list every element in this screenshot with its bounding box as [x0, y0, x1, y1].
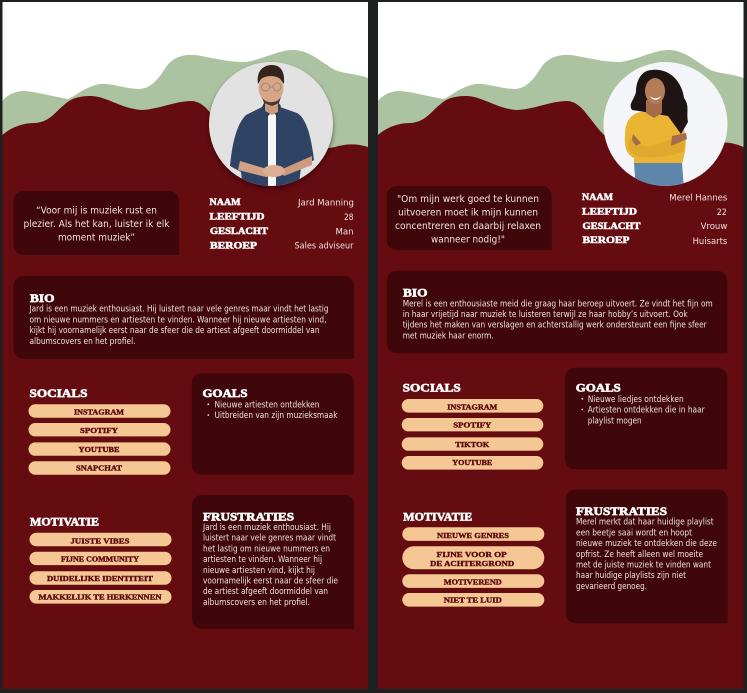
motivatie	[30, 517, 172, 604]
socials: SPOTIFY	[453, 420, 492, 430]
socials: INSTAGRAM	[447, 402, 497, 411]
frustraties: artiesten te vinden. Wanneer hij	[203, 555, 322, 565]
frustraties: FRUSTRATIES	[576, 506, 667, 518]
bio	[387, 271, 727, 353]
personal details: NAAM	[210, 198, 241, 208]
frustraties: haar huidige playlists zijn niet	[576, 571, 687, 581]
quote: wanneer nodig!"	[431, 234, 505, 246]
goals: Nieuwe artiesten ontdekken	[214, 400, 320, 410]
bio: tijdens het maken van verslagen en achterstallig werk ondersteunt een fijne sfeer	[403, 321, 707, 331]
motivatie: NIET TE LUID	[444, 596, 502, 604]
bio: BIO	[30, 293, 55, 305]
socials: YOUTUBE	[452, 458, 492, 467]
motivatie: MOTIVEREND	[444, 578, 502, 586]
bio: kijkt hij voornamelijk eerst naar de sfeer die de artiest afgeeft doormiddel van	[30, 326, 320, 336]
frustraties: Jard is een muziek enthousiast. Hij	[202, 523, 331, 533]
goals	[192, 373, 354, 475]
quote: plezier. Als het kan, luister ik elk	[24, 219, 170, 230]
goals: Artiesten ontdekken die in haar	[588, 406, 705, 416]
quote: "Om mijn werk goed te kunnen	[397, 194, 539, 205]
page background	[2, 2, 368, 689]
goals: Nieuwe liedjes ontdekken	[588, 395, 684, 405]
personal details: LEEFTIJD	[582, 208, 637, 218]
socials: INSTAGRAM	[74, 407, 124, 416]
socials: SOCIALS	[30, 388, 88, 400]
bio: BIO	[403, 287, 428, 299]
motivatie: NIEUWE GENRES	[437, 531, 509, 540]
red wave background	[378, 96, 744, 689]
personal details: BEROEP	[210, 242, 257, 252]
frustraties: albumscovers en het profiel.	[203, 598, 310, 608]
goals: GOALS	[202, 388, 248, 400]
frustraties	[566, 490, 728, 623]
frustraties: gevarieerd genoeg.	[576, 582, 647, 592]
goals	[565, 368, 727, 469]
quote: moment muziek”	[58, 232, 135, 244]
personal details: 28	[344, 213, 354, 223]
motivatie: DUIDELIJKE IDENTITEIT	[47, 574, 153, 583]
red wave background	[2, 96, 368, 689]
bio: in haar vrijetijd naar muziek te luisteren terwijl ze haar hobby’s uitvoert. Ook	[403, 310, 688, 320]
frustraties: het lastig om nieuwe nummers en	[203, 544, 330, 554]
personal details: 22	[717, 208, 727, 218]
bio: met muziek haar enorm.	[403, 332, 494, 342]
frustraties: FRUSTRATIES	[203, 511, 294, 523]
bio: om nieuwe nummers en artiesten te vinden. Wanneer hij nieuwe artiesten vind,	[30, 316, 326, 326]
green wave	[378, 50, 744, 170]
motivatie: DE ACHTERGROND	[430, 559, 515, 568]
frustraties: opfrist. Ze heeft alleen wel moeite	[576, 550, 703, 560]
page background	[378, 2, 744, 689]
motivatie: FIJNE VOOR OP	[437, 550, 507, 559]
personal details: Vrouw	[701, 222, 727, 232]
quote: uitvoeren moet ik mijn kunnen	[398, 208, 538, 218]
personal details: Sales adviseur	[294, 242, 354, 252]
frustraties: Merel merkt dat haar huidige playlist	[576, 518, 714, 528]
socials: TIKTOK	[455, 440, 489, 449]
frustraties: met de juiste muziek te vinden want	[576, 560, 712, 570]
bio: albumscovers en het profiel.	[30, 337, 136, 347]
personal details: GESLACHT	[210, 227, 269, 237]
motivatie	[402, 511, 544, 607]
frustraties: nieuwe artiesten vind, kijkt hij	[203, 566, 315, 576]
frustraties: een beetje saai wordt en hoopt	[576, 528, 693, 538]
quote: “Voor mij is muziek rust en	[36, 206, 157, 216]
motivatie: JUISTE VIBES	[70, 536, 130, 545]
green wave	[2, 50, 368, 170]
frustraties: voornamelijk eerst naar de sfeer die	[203, 576, 338, 586]
panel: persona Jard	[2, 2, 368, 689]
motivatie: FIJNE COMMUNITY	[61, 554, 140, 564]
personal details: LEEFTIJD	[210, 212, 265, 222]
goals: Uitbreiden van zijn muzieksmaak	[214, 411, 338, 421]
frustraties: nieuwe muziek te ontdekken die deze	[576, 539, 717, 549]
goals: GOALS	[576, 383, 621, 395]
frustraties: de artiest afgeeft doormiddel van	[203, 587, 328, 597]
personal details: BEROEP	[582, 236, 630, 246]
frustraties: luistert naar vele genres maar vindt	[203, 534, 337, 544]
personal details	[582, 193, 728, 247]
personal details: Merel Hannes	[669, 194, 728, 204]
socials: SPOTIFY	[80, 426, 119, 435]
portrait: Merel	[604, 62, 728, 190]
personal details: NAAM	[582, 193, 613, 203]
socials	[28, 388, 170, 475]
quote: concentreren en daarbij relaxen	[395, 221, 541, 232]
quote	[14, 191, 179, 255]
frustraties	[192, 495, 354, 629]
socials: YOUTUBE	[78, 445, 120, 454]
motivatie: MAKKELIJK TE HERKENNEN	[38, 592, 162, 602]
personal details: Huisarts	[693, 237, 728, 247]
motivatie: MOTIVATIE	[403, 511, 473, 523]
personal details	[210, 198, 354, 252]
panel: persona Merel	[378, 2, 744, 689]
personal details: GESLACHT	[582, 222, 641, 232]
socials	[402, 383, 543, 470]
motivatie: MOTIVATIE	[30, 517, 99, 529]
personal details: Man	[336, 228, 354, 238]
socials: SOCIALS	[403, 383, 461, 395]
personal details: Jard Manning	[297, 198, 354, 208]
socials: SNAPCHAT	[76, 464, 122, 472]
quote	[387, 186, 552, 250]
bio	[14, 276, 354, 359]
goals: playlist mogen	[588, 416, 642, 426]
bio: Jard is een muziek enthousiast. Hij luistert naar vele genres maar vindt het lastig	[29, 305, 328, 315]
portrait: Jard	[209, 62, 333, 190]
